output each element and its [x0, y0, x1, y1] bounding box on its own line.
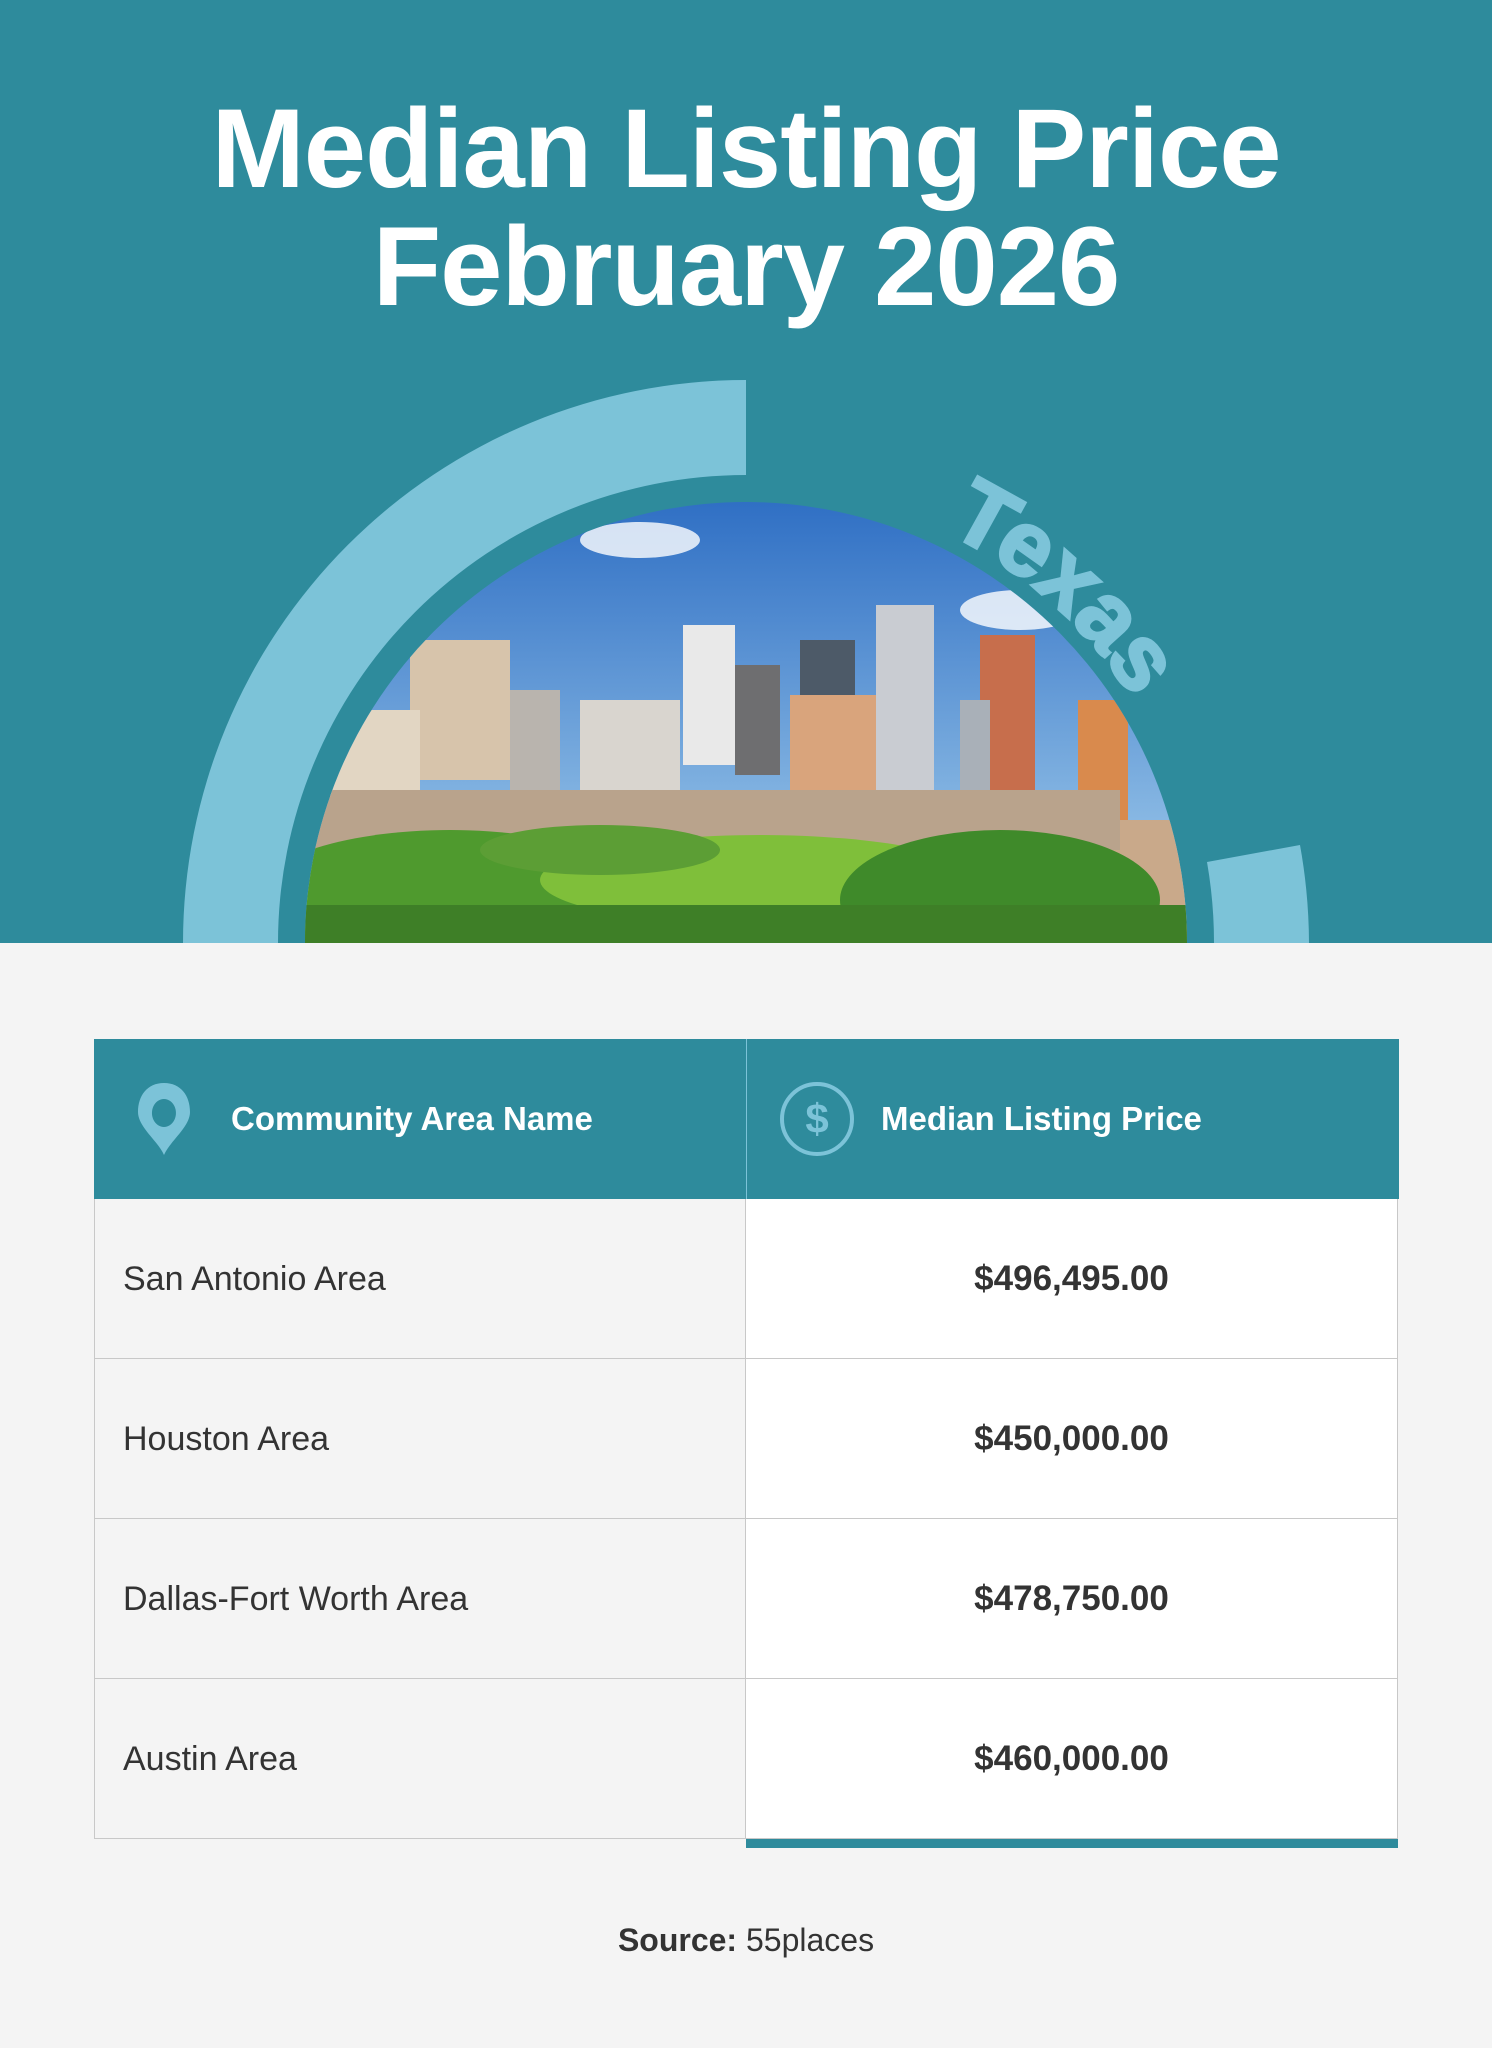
row 4: Austin Area: [123, 1740, 297, 1778]
header cell: price: Median Listing Price: [881, 1100, 1202, 1137]
icon: dollar: [780, 1082, 854, 1156]
row 4: [94, 1679, 746, 1839]
text: $460,000.00: [974, 1739, 1169, 1778]
header graphic: [183, 380, 1309, 943]
header background: [0, 0, 1492, 943]
row 1: [94, 1199, 746, 1359]
text: $496,495.00: [974, 1259, 1169, 1298]
text: $450,000.00: [974, 1419, 1169, 1458]
ring segment right: [1207, 845, 1309, 943]
Texas label: [946, 532, 1142, 714]
text: $478,750.00: [974, 1579, 1169, 1618]
accent bar: [746, 1839, 1398, 1848]
header cell: price: [746, 1039, 1399, 1199]
icon: dollar: $: [805, 1095, 829, 1142]
row 2: Houston Area: [123, 1420, 329, 1458]
ring arc: [183, 380, 746, 943]
header cell: community: Community Area Name: [231, 1100, 593, 1137]
source: Source: 55places: [618, 1922, 874, 1958]
header graphic: Texas: [963, 474, 1166, 692]
title: Median Listing Price: [211, 86, 1281, 211]
title: February 2026: [373, 204, 1119, 329]
row 3: [94, 1519, 746, 1679]
table: [94, 1039, 1399, 1848]
title: [211, 86, 1281, 329]
city photo: [305, 502, 1187, 943]
header cell: community: [94, 1039, 746, 1199]
row 3: Dallas-Fort Worth Area: [123, 1580, 468, 1618]
row 2: [94, 1359, 746, 1519]
row 1: San Antonio Area: [123, 1260, 386, 1298]
icon: location pin: [138, 1083, 190, 1155]
